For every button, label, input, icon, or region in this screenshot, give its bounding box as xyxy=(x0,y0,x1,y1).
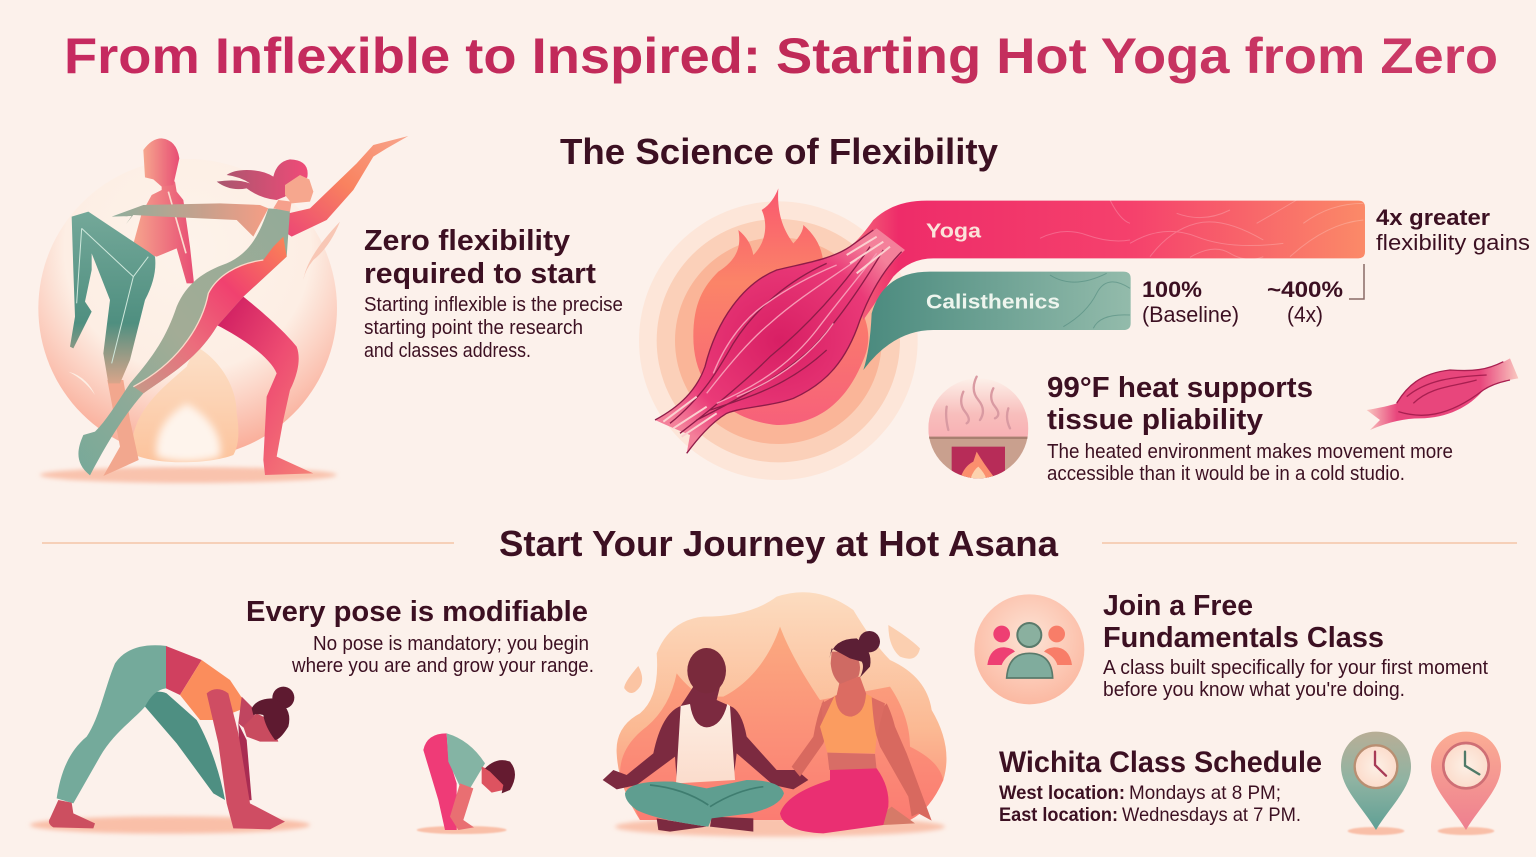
text block: class schedule: West location: xyxy=(999,782,1125,804)
heading: science of flexibility: The Science of Flexibility xyxy=(560,131,998,172)
label: 100% baseline: 100% xyxy=(1142,277,1202,302)
text block: class schedule xyxy=(999,746,1322,826)
icon: small muscle xyxy=(1367,358,1518,430)
bar: yoga xyxy=(847,201,1365,320)
text block: class schedule: Mondays at 8 PM; xyxy=(1129,782,1281,804)
label: 400 percent: (4x) xyxy=(1287,302,1323,327)
stat: 4x greater flexibility gains xyxy=(1376,205,1530,255)
text block: class schedule: East location: xyxy=(999,804,1118,826)
text block: 99F heat: accessible than it would be in a cold studio. xyxy=(1047,463,1405,485)
text block: join a free class: Fundamentals Class xyxy=(1103,622,1384,654)
text block: join a free class: A class built specifically for your first moment xyxy=(1103,657,1488,679)
front dancer xyxy=(78,136,408,475)
text block: 99F heat: 99°F heat supports xyxy=(1047,372,1313,404)
text block: 99F heat: The heated environment makes movement more xyxy=(1047,441,1453,463)
illustration: two people meditating with flames xyxy=(603,592,946,837)
text block: 99F heat: tissue pliability xyxy=(1047,404,1263,436)
stat: 4x greater flexibility gains: 4x greater xyxy=(1376,205,1490,230)
muscle belly xyxy=(655,228,905,453)
person: woman xyxy=(780,631,932,833)
text block: class schedule: Wednesdays at 7 PM. xyxy=(1122,804,1301,826)
icon: group of people xyxy=(974,594,1084,704)
stat: 4x greater flexibility gains: flexibility gains xyxy=(1376,230,1530,255)
text block: 99F heat xyxy=(1047,372,1453,485)
text block: zero flexibility: Starting inflexible is the precise xyxy=(364,294,623,316)
label: 400 percent xyxy=(1267,277,1343,327)
bar label: calisthenics: Calisthenics xyxy=(926,291,1060,313)
text block: join a free class: Join a Free xyxy=(1103,590,1253,622)
text block: zero flexibility: required to start xyxy=(364,258,596,290)
heading: start your journey: Start Your Journey at Hot Asana xyxy=(499,523,1059,564)
muscle diagram with flame xyxy=(639,188,1365,480)
text block: zero flexibility xyxy=(364,225,623,362)
icon: heat and fireplace xyxy=(928,377,1028,480)
text block: zero flexibility: Zero flexibility xyxy=(364,225,570,257)
icon: west location clock pin xyxy=(1341,732,1411,835)
text block: zero flexibility: and classes address. xyxy=(364,340,531,362)
illustration: downward dog figure xyxy=(30,645,310,834)
text block: join a free class xyxy=(1103,590,1488,701)
bar: calisthenics xyxy=(863,272,1131,370)
text block: zero flexibility: starting point the research xyxy=(364,317,583,339)
icon: east location clock pin xyxy=(1431,732,1501,835)
person: man xyxy=(603,648,808,832)
title: From Inflexible to Inspired: Starting Hot Yoga from Zero xyxy=(64,28,1498,84)
text block: every pose is modifiable xyxy=(246,596,594,677)
text block: class schedule: Wichita Class Schedule xyxy=(999,746,1322,779)
label: 400 percent: ~400% xyxy=(1267,277,1343,302)
text block: every pose is modifiable: Every pose is modifiable xyxy=(246,596,588,628)
label: 100% baseline xyxy=(1142,277,1239,327)
label: 100% baseline: (Baseline) xyxy=(1142,302,1239,327)
illustration: small forward fold figure xyxy=(417,733,515,834)
text block: every pose is modifiable: where you are and grow your range. xyxy=(291,655,594,677)
bar label: yoga: Yoga xyxy=(926,220,982,242)
illustration: stiff figure and flexible dancer over flame disc xyxy=(38,136,408,483)
text block: every pose is modifiable: No pose is mandatory; you begin xyxy=(313,633,589,655)
back figure xyxy=(70,138,194,476)
text block: join a free class: before you know what you're doing. xyxy=(1103,679,1405,701)
